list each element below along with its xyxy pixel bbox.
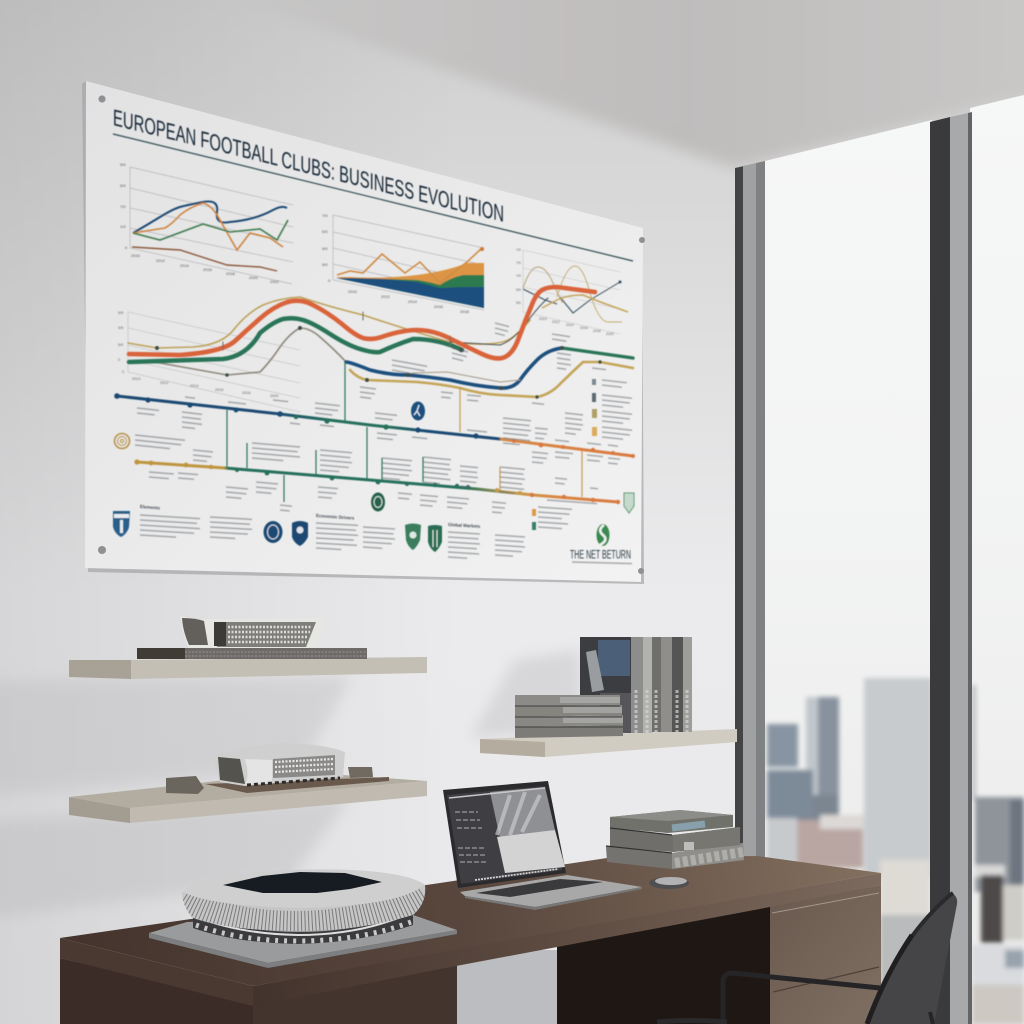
curve markers (155, 326, 602, 399)
axis labels: 7/0 (322, 213, 328, 218)
axis labels: 0 (125, 245, 128, 250)
axis labels: 2018 (242, 391, 250, 395)
lower timeline (134, 459, 620, 504)
orange thick curve (129, 287, 595, 358)
navy thick curve (346, 348, 562, 388)
desk left edge (60, 938, 253, 1006)
brand logo (570, 524, 631, 562)
desk drawer left side (60, 958, 253, 1024)
axis labels (118, 311, 278, 398)
window view (765, 95, 1024, 1024)
axis labels: 2012 (552, 320, 560, 324)
axis labels: 5/0 (516, 301, 521, 305)
axis labels: 5/5 (118, 311, 123, 315)
icon: runner badge (411, 402, 425, 420)
axis labels: 2016 (215, 388, 223, 392)
line chart: top left (120, 162, 293, 284)
window frames (735, 112, 972, 1024)
stadium ribs (183, 893, 424, 926)
lower left shelf (69, 772, 427, 823)
section headings: Elements (140, 504, 160, 511)
mouse (649, 877, 689, 889)
axis labels: 5/0 (120, 183, 126, 188)
large stadium model on desk (149, 869, 457, 968)
axis labels: 5/0 (322, 246, 328, 251)
axis labels: 2010 (539, 317, 547, 321)
axis labels: 2012 (160, 381, 168, 385)
axis labels: 2012 (381, 294, 391, 299)
icon: target (114, 434, 130, 448)
stadium shell (182, 869, 425, 931)
timeline connector verticals (227, 362, 423, 502)
axis labels: 2014 (180, 263, 190, 268)
axis labels: 5/0 (322, 262, 328, 267)
gap below desk (457, 950, 557, 1024)
panel contents (113, 104, 635, 564)
sky glass (765, 120, 932, 1024)
axis labels: 2016 (203, 267, 213, 272)
axis labels: 2020 (249, 275, 259, 280)
axis labels (120, 162, 280, 284)
axis labels: 5/0 (120, 162, 126, 167)
desk right drawers (770, 885, 881, 1024)
icon: shield crest navy (292, 521, 308, 546)
desk drawer left front (253, 962, 457, 1024)
laptop (443, 781, 642, 910)
axis labels: 7/0 (516, 248, 521, 252)
stacked books on shelf (515, 695, 623, 738)
axis labels: 5/0 (322, 229, 328, 234)
axis labels: 2014 (190, 384, 198, 388)
line chart: top right (516, 248, 628, 336)
grey curve (129, 328, 347, 375)
desk front edge (253, 873, 881, 1006)
green thick curve (129, 318, 462, 362)
stadium lower tier (193, 908, 413, 944)
axis labels (516, 248, 614, 336)
desk top surface (60, 856, 881, 986)
upper left shelf (69, 657, 427, 679)
upper timeline (114, 393, 635, 458)
axis labels: 0 (122, 370, 124, 374)
icon: club shield navy (113, 511, 130, 537)
legend icons (532, 379, 597, 530)
axis labels: 1/0 (120, 224, 126, 229)
icon: round crest navy (264, 521, 282, 543)
axis labels: 5/0 (516, 288, 521, 292)
axis labels: 7/0 (516, 261, 521, 265)
green thick right curve (562, 348, 633, 358)
desk books (606, 810, 744, 869)
axis labels: 2020 (270, 394, 278, 398)
stadium pitch opening (223, 872, 382, 893)
axis labels: 2010 (348, 289, 358, 294)
axis labels: 2012 (156, 258, 166, 263)
panel shadow and edge (82, 81, 644, 584)
axis labels: 0 (328, 278, 331, 283)
chair arm (723, 973, 880, 1024)
upright books (580, 637, 692, 733)
mounting bolts (98, 95, 645, 574)
thin grey curve (413, 372, 520, 382)
area chart: top centre (322, 213, 484, 314)
wall poster panel (82, 81, 645, 584)
title rule (113, 134, 633, 261)
right shelf shadow (470, 650, 580, 738)
axis labels: 2018 (226, 271, 236, 276)
fine print annotation blocks (135, 323, 632, 564)
axis labels: 2014 (566, 323, 574, 327)
lower timeline nodes (134, 459, 213, 469)
axis labels: 2022 (270, 279, 280, 284)
office chair (657, 893, 957, 1024)
axis labels: 2018 (593, 329, 601, 333)
axis labels: 2016 (580, 326, 588, 330)
axis labels: 5/5 (118, 326, 123, 330)
icon: green round crest (371, 492, 385, 512)
axis labels: 7/0 (516, 274, 521, 278)
brand name: THE NET BETURN (570, 550, 631, 562)
axis labels: 0 (118, 358, 120, 362)
axis labels: 2010 (132, 377, 140, 381)
icon: pale green shield (624, 493, 634, 513)
shelf 2 shadow (0, 798, 350, 925)
dark connector (450, 298, 548, 345)
laptop screen (443, 781, 566, 888)
shelf 1 shadow (0, 676, 352, 800)
section headings: Economic Drivers (316, 513, 355, 521)
stadium model on lower shelf (166, 743, 389, 794)
axis labels: 2016 (434, 304, 444, 309)
gold lower curve (350, 362, 633, 397)
laptop base (460, 875, 642, 907)
axis labels: 2010 (131, 253, 141, 258)
stadium roof (183, 869, 424, 908)
section headings (140, 504, 481, 529)
right shelf (480, 729, 737, 757)
axis labels: 7/0 (120, 204, 126, 209)
axis labels: 5/0 (118, 343, 123, 347)
axis labels: 2014 (408, 299, 418, 304)
axis labels (322, 213, 470, 314)
desk (60, 856, 881, 1024)
desk knee panel (557, 904, 770, 1024)
warm connector verticals (460, 388, 582, 497)
stadium model on upper shelf (137, 616, 367, 659)
title: EUROPEAN FOOTBALL CLUBS: BUSINESS EVOLUTION (113, 104, 504, 227)
axis labels: 2020 (606, 332, 614, 336)
upper timeline nodes (114, 393, 283, 417)
ceiling (120, 0, 1024, 168)
stadium base plate (149, 915, 457, 963)
main evolution chart (118, 287, 633, 412)
axis labels: 2018 (460, 309, 470, 314)
blurred city buildings (767, 678, 1024, 1024)
icon: green shield crests (405, 524, 442, 552)
gold upper curve (128, 297, 530, 348)
section headings: Global Markets (448, 522, 481, 529)
miniature trees (166, 776, 204, 794)
